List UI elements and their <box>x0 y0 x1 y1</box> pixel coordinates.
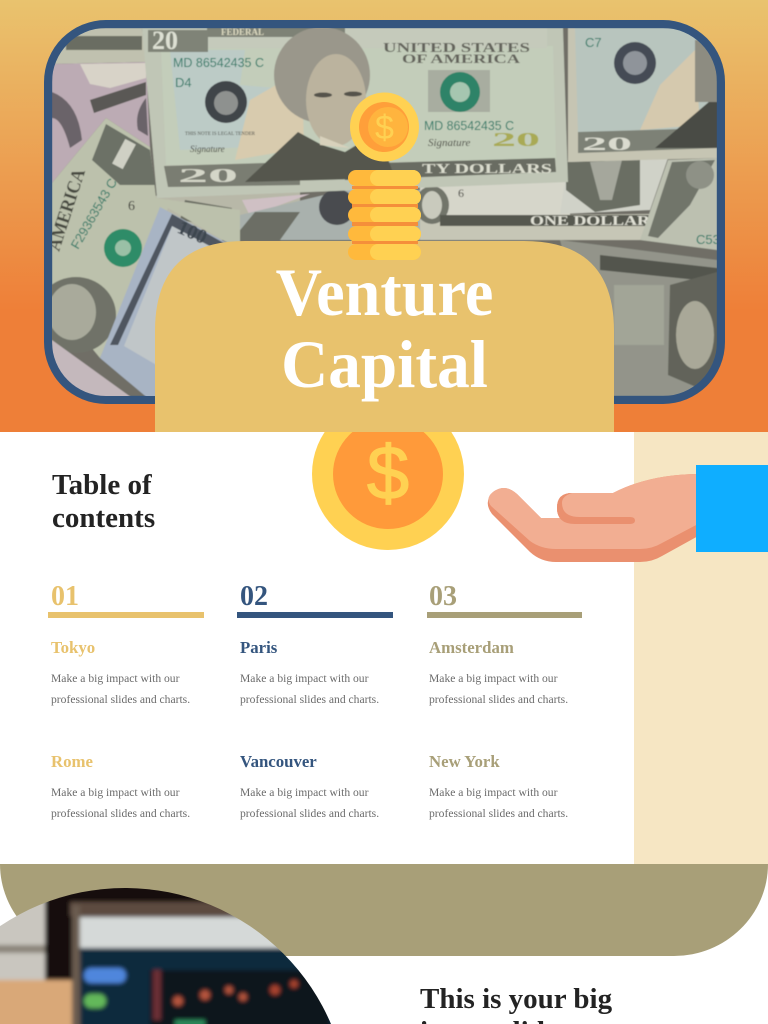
photo: banknotes: F29363543 C <box>68 176 120 252</box>
column 3: professional slides and charts. <box>429 807 568 820</box>
photo: banknotes: MD 86542435 C <box>424 118 514 133</box>
blue sleeve cuff <box>696 465 768 552</box>
photo: banknotes: THIS NOTE IS LEGAL TENDER <box>185 132 256 137</box>
photo: banknotes: ONE DOLLAR <box>530 214 651 229</box>
photo: banknotes: C7 <box>585 35 602 50</box>
big coin illustration: $ <box>367 431 409 516</box>
column 3: Make a big impact with our <box>429 786 558 799</box>
small falling coin: $ <box>375 109 394 147</box>
olive banner <box>0 864 768 956</box>
photo: banknotes: AMERICA <box>44 166 90 254</box>
hand illustration <box>488 474 700 562</box>
photo: banknotes: TY DOLLARS <box>422 162 552 177</box>
column 2: Make a big impact with our <box>240 786 369 799</box>
column 3 <box>427 581 582 820</box>
column 3: Make a big impact with our <box>429 672 558 685</box>
heading: table of contents <box>52 469 155 534</box>
photo: banknotes: 20 <box>492 129 540 151</box>
photo: trading screen <box>0 888 331 1024</box>
column 2: professional slides and charts. <box>240 807 379 820</box>
photo: banknotes: Signature <box>190 144 225 154</box>
big coin illustration <box>312 432 464 550</box>
green seal left <box>104 229 142 267</box>
photo: banknotes <box>36 26 720 400</box>
photo: banknotes: 20 <box>152 26 178 55</box>
column 3: Amsterdam <box>429 638 514 657</box>
coin stack <box>348 170 421 260</box>
column 2: 02 <box>240 581 268 612</box>
column 3: New York <box>429 752 500 771</box>
photo: banknotes: 20 <box>582 134 632 155</box>
heading: table of contents: contents <box>52 502 155 534</box>
photo: banknotes: D4 <box>175 75 192 90</box>
column 1: Tokyo <box>51 638 95 657</box>
column 2: Make a big impact with our <box>240 672 369 685</box>
photo: banknotes: 6 <box>128 199 135 214</box>
column 1: professional slides and charts. <box>51 807 190 820</box>
photo: banknotes: Signature <box>428 137 470 149</box>
title: Capital <box>281 328 488 402</box>
closing heading: This is your big <box>420 983 613 1015</box>
portrait <box>245 132 395 182</box>
photo: banknotes: 20 <box>178 165 238 187</box>
column 3: professional slides and charts. <box>429 693 568 706</box>
column 2: professional slides and charts. <box>240 693 379 706</box>
photo: banknotes: 100 <box>174 216 210 249</box>
column 1 <box>48 581 204 820</box>
photo frame <box>44 20 725 404</box>
small falling coin <box>350 92 419 162</box>
title <box>276 255 493 402</box>
photo: banknotes: C53 <box>696 232 720 247</box>
photo: banknotes: MD 86542435 C <box>173 55 264 70</box>
photo: banknotes: FEDERAL <box>221 27 264 37</box>
column 2: Vancouver <box>240 752 317 771</box>
photo: banknotes: 6 <box>458 186 464 200</box>
column 1: Make a big impact with our <box>51 786 180 799</box>
side beige panel <box>634 432 768 864</box>
column 3: 03 <box>429 581 457 612</box>
column 1: 01 <box>51 581 79 612</box>
photo: banknotes: OF AMERICA <box>402 51 521 66</box>
column 2: Paris <box>240 638 278 657</box>
hero gradient background <box>0 0 768 432</box>
title: Venture <box>276 255 493 330</box>
column 2 <box>237 581 393 820</box>
column 1: Make a big impact with our <box>51 672 180 685</box>
column 1: professional slides and charts. <box>51 693 190 706</box>
column 1: Rome <box>51 752 93 771</box>
heading: table of contents: Table of <box>52 469 152 501</box>
title panel <box>155 241 614 432</box>
hero section <box>0 0 768 432</box>
photo: banknotes: UNITED STATES <box>383 41 530 56</box>
